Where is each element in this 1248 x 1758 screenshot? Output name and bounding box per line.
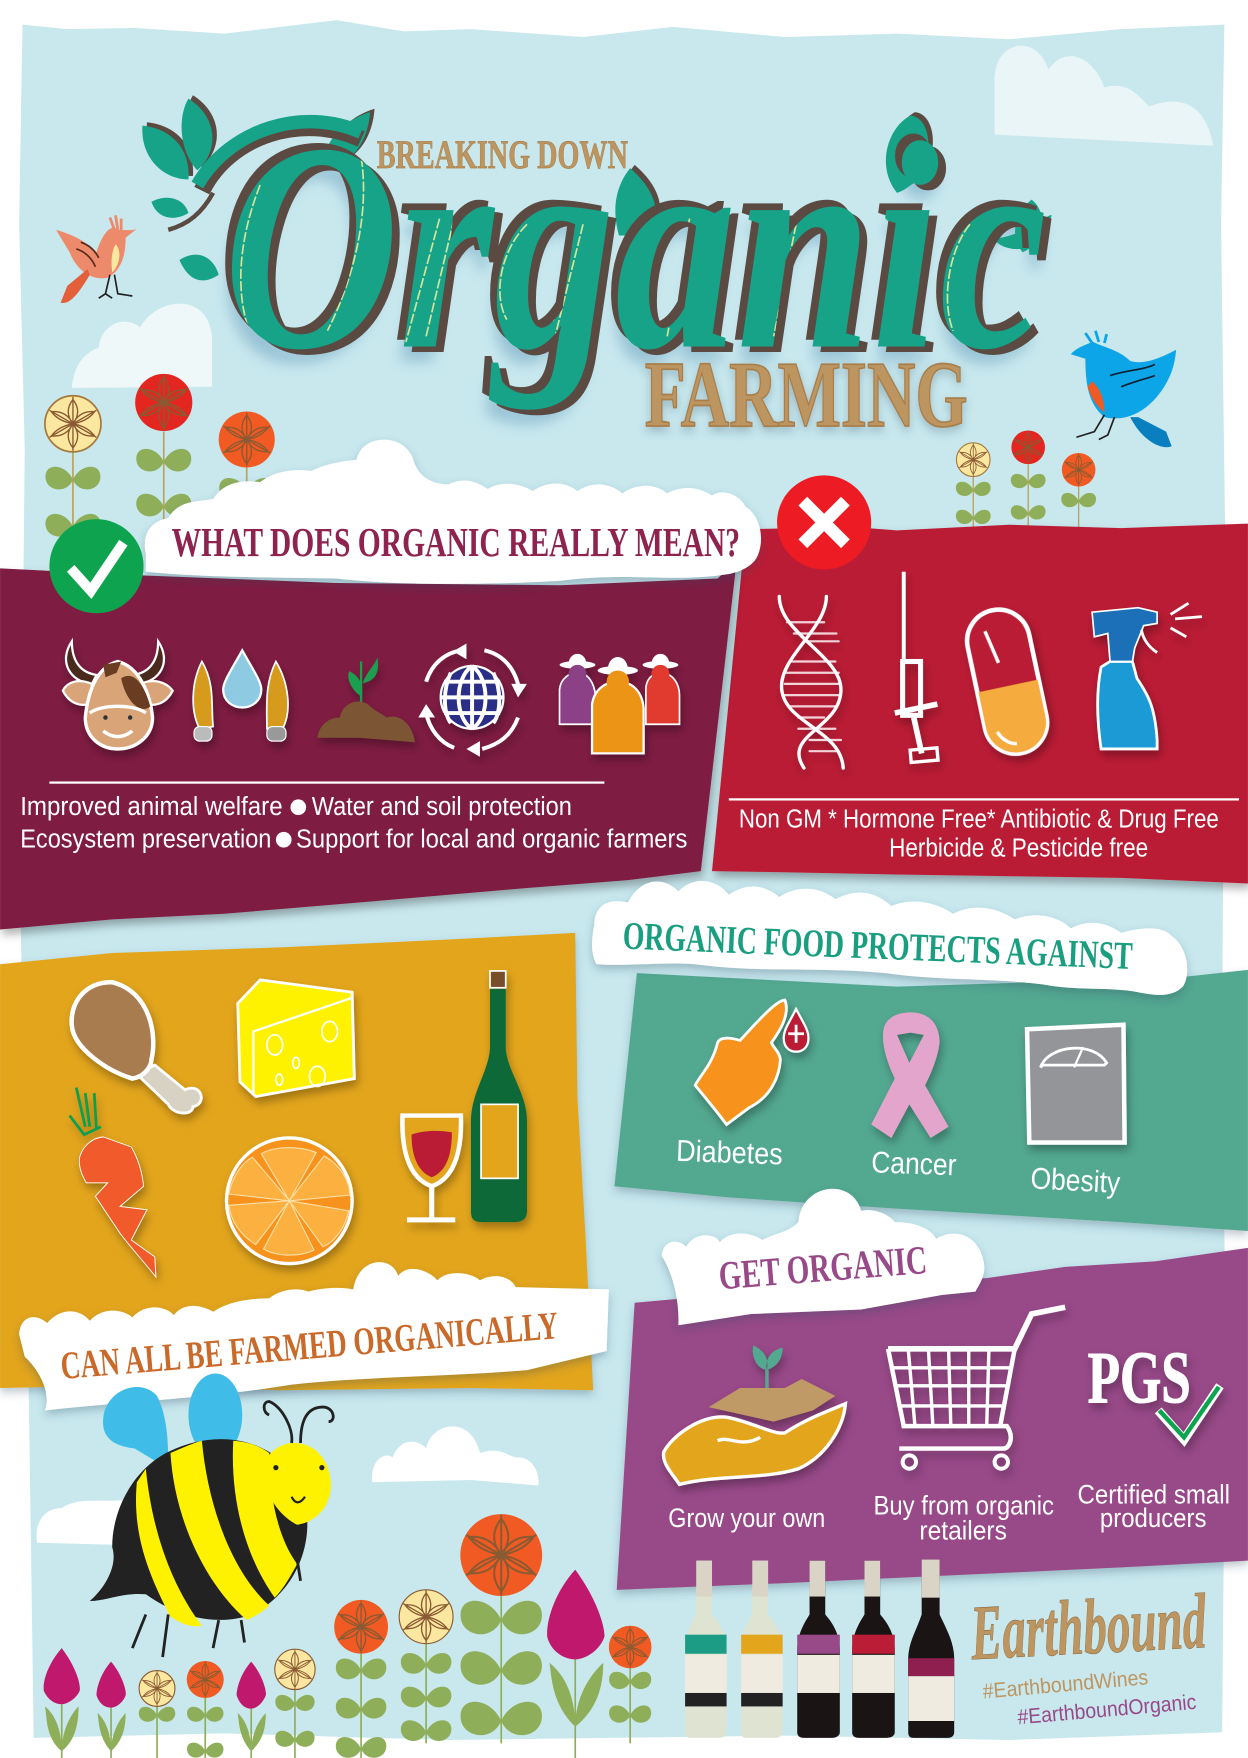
label: certified small producers	[1078, 1479, 1230, 1533]
icon: farmers	[560, 654, 679, 753]
label: grow your own: Grow your own	[668, 1503, 825, 1533]
purple panel	[617, 1248, 1248, 1590]
panel: teal protects against	[614, 970, 1248, 1231]
heading text: WHAT DOES ORGANIC REALLY MEAN?	[172, 519, 740, 565]
label: certified small producers: producers	[1100, 1503, 1206, 1533]
panel: no (red)	[712, 524, 1248, 883]
icon: wine glass	[402, 1116, 461, 1220]
no list text: Herbicide & Pesticide free	[889, 835, 1148, 863]
bottle 5	[908, 1560, 954, 1738]
maroon rule	[49, 781, 604, 784]
title: breaking down organic farming	[142, 76, 1055, 447]
organic brown shadow front: Organic	[216, 76, 1041, 405]
heading text: CAN ALL BE FARMED ORGANICALLY	[59, 1304, 560, 1388]
red panel	[712, 524, 1248, 883]
yes list text: Ecosystem preservation	[20, 826, 271, 854]
farming: FARMING	[645, 343, 968, 447]
white cloud	[662, 1189, 984, 1325]
icon: globe with arrows	[418, 644, 527, 757]
icon: syringe	[895, 572, 938, 762]
icon: orange slice	[227, 1138, 352, 1264]
icon: pgs check: PGS	[1088, 1338, 1191, 1420]
icon: cheese	[238, 980, 354, 1097]
label: diabetes: Diabetes	[676, 1135, 783, 1172]
bottle 4	[852, 1561, 895, 1738]
wine bottles	[685, 1560, 954, 1738]
white cloud	[145, 440, 761, 584]
panel: orange foods	[0, 933, 593, 1390]
cloud: bee left	[37, 1500, 123, 1545]
icon: cow	[63, 641, 173, 749]
cloud: top right	[995, 46, 1213, 146]
panel: yes (maroon)	[0, 561, 737, 929]
red rule	[729, 798, 1239, 801]
bottle 1	[685, 1561, 727, 1738]
body	[90, 1439, 307, 1620]
icon: soil and seedling	[317, 661, 415, 742]
yes list text: Water and soil protection	[312, 793, 572, 821]
icon: dna	[779, 596, 843, 768]
no list text	[739, 805, 1219, 863]
hashtag: earthbound wines: #EarthboundWines	[982, 1665, 1149, 1704]
icon: scale	[1027, 1025, 1125, 1142]
heading: can all be farmed organically	[19, 1262, 609, 1410]
tulips	[44, 1570, 605, 1709]
heading: what does organic really mean	[145, 440, 761, 584]
icon: wine bottle	[471, 971, 527, 1222]
hashtag: earthbound organic: #EarthboundOrganic	[1016, 1690, 1198, 1729]
teal panel	[614, 970, 1248, 1231]
icon: spray bottle	[1092, 603, 1202, 749]
yes list text: Improved animal welfare	[20, 793, 283, 821]
panel: purple get organic	[617, 1248, 1248, 1590]
bottle 2	[741, 1561, 783, 1738]
yes list text: Support for local and organic farmers	[296, 826, 687, 854]
heading text: GET ORGANIC	[717, 1237, 928, 1298]
yes list text	[20, 793, 687, 854]
label: buy from organic retailers: retailers	[919, 1515, 1007, 1545]
cloud: left	[72, 304, 212, 388]
leaves	[139, 1707, 175, 1722]
bird: pink	[56, 215, 137, 303]
stems	[62, 1595, 630, 1758]
vine and leaves	[142, 95, 1052, 280]
flowers: top left	[45, 374, 275, 549]
bottle 3	[797, 1561, 840, 1738]
organic brown shadow back: Organic	[231, 88, 1055, 417]
icon: red cross	[777, 475, 871, 570]
antennae and legs	[132, 1401, 333, 1657]
heading: get organic	[662, 1189, 984, 1325]
head	[263, 1443, 331, 1525]
title shadow: Organic	[219, 97, 1048, 426]
organic word: Organic	[223, 82, 1047, 411]
breaking down: BREAKING DOWN	[377, 132, 628, 177]
orange panel	[0, 933, 593, 1390]
heading: organic food protects against	[592, 881, 1187, 995]
bird: blue	[1071, 331, 1176, 447]
icon: shopping cart	[888, 1307, 1065, 1469]
label: obesity: Obesity	[1030, 1162, 1122, 1200]
flowers: bottom	[44, 1514, 651, 1758]
round heads	[139, 1671, 175, 1706]
icon: cancer ribbon	[871, 1012, 949, 1138]
maroon panel	[0, 561, 737, 929]
icon: diabetes hand	[695, 1000, 808, 1125]
white cloud	[19, 1262, 609, 1410]
chalk highlights	[240, 160, 970, 342]
icon: drumstick	[72, 982, 201, 1113]
bee	[90, 1373, 333, 1657]
label: buy from organic retailers: Buy from organic	[873, 1491, 1054, 1521]
icon: carrot	[70, 1088, 156, 1277]
label: certified small producers: Certified small	[1078, 1479, 1230, 1509]
white cloud	[592, 881, 1187, 995]
icon: water in hands	[193, 650, 288, 741]
label: buy from organic retailers	[873, 1491, 1054, 1545]
icon: green check	[49, 519, 144, 613]
label: cancer: Cancer	[871, 1146, 957, 1182]
wings	[103, 1387, 168, 1469]
yellow stripes	[136, 1441, 297, 1626]
icon: capsule	[961, 604, 1053, 759]
cloud: bee right	[372, 1426, 539, 1486]
icon: hand with soil and sprout	[664, 1345, 845, 1484]
flowers: top right	[956, 431, 1096, 527]
